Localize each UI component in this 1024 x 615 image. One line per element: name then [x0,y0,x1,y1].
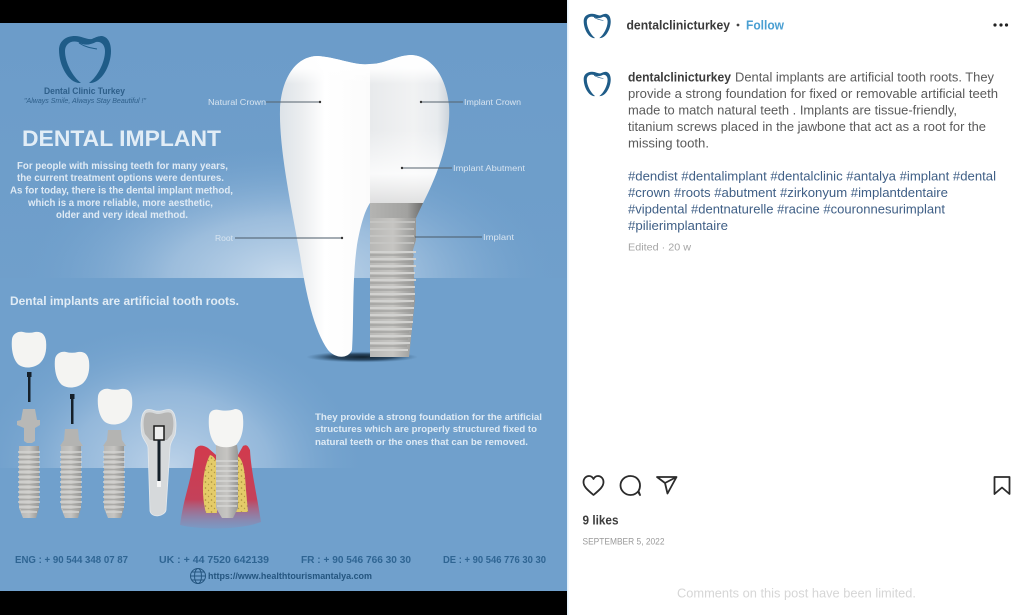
label: natural crown: Natural Crown [208,97,266,107]
contact phone numbers: ENG : + 90 544 348 07 87 [15,554,128,566]
contact phone numbers [15,554,546,566]
intro text block [10,161,233,221]
intro text block: For people with missing teeth for many years, [17,161,228,172]
icon: comment [620,476,640,495]
caption avatar [584,72,611,96]
stage 1: crown, screw, abutment, fixture [12,332,46,518]
caption text [628,70,998,150]
subheading: artificial tooth roots: Dental implants are artificial tooth roots. [10,294,239,308]
implant crown half [370,55,449,203]
caption text: titanium screws placed in the jawbone that act as a root for the [628,119,986,134]
hashtags: #crown #roots #abutment #zirkonyum #implantdentaire [628,185,948,200]
caption text: provide a strong foundation for fixed or removable artificial teeth [628,86,998,101]
caption text: Dental implants are artificial tooth roots. They [735,70,994,84]
icon: bookmark [994,477,1010,494]
caption text: made to match natural teeth . Implants are tissue-friendly, [628,102,957,118]
hashtags: #vipdental #dentnaturelle #racine #couronnesurimplant [628,202,945,216]
label: natural crown [208,97,321,107]
intro text block: older and very ideal method. [56,210,188,221]
label: root: Root [215,234,234,243]
intro text block: which is a more reliable, more aesthetic, [27,198,213,209]
header avatar [584,14,611,38]
shadow under tooth [306,352,418,362]
stage 3: crown, fixture [98,389,132,518]
intro text block: As for today, there is the dental implant method, [10,186,233,196]
caption text: missing tooth. [628,136,709,150]
caption text: dentalclinicturkey [628,70,732,84]
label: implant [415,232,515,242]
label: implant: Implant [483,232,515,242]
foundation text block: natural teeth or the ones that can be removed. [315,437,528,448]
foundation text block [315,412,542,448]
title: DENTAL IMPLANT [22,126,222,151]
panel: infographic image [0,0,567,615]
foundation text block: They provide a strong foundation for the artificial [315,412,542,423]
logo: dental clinic turkey: Dental Clinic Turkey [44,86,125,96]
stage 4: cross section [141,409,176,516]
more options icon [993,23,1008,27]
likes count: 9 likes [582,514,619,528]
hashtags: #pilierimplantaire [628,218,728,233]
logo: dental clinic turkey [24,36,146,105]
intro text block: the current treatment options were dentures. [17,173,224,184]
label: implant crown [420,97,521,107]
icon: heart [584,476,604,495]
natural tooth half [280,56,370,357]
contact phone numbers: UK : + 44 7520 642139 [159,554,269,566]
label: implant abutment: Implant Abutment [453,163,526,173]
website with globe icon [190,568,372,584]
stage 5: implant in jaw [180,409,261,528]
panel: instagram sidebar [567,0,1024,615]
large tooth diagram [208,50,526,362]
header username and follow: Follow [746,18,785,32]
stage 2: crown, screw, fixture [55,352,89,518]
implant stages illustration [12,332,261,528]
contact phone numbers: DE : + 90 546 776 30 30 [443,554,546,566]
post date: SEPTEMBER 5, 2022 [582,536,664,548]
website with globe icon: https://www.healthtourismantalya.com [208,571,372,582]
hashtags: #dendist #dentalimplant #dentalclinic #antalya #implant #dental [628,168,996,184]
label: root [215,234,343,243]
contact phone numbers: FR : + 90 546 766 30 30 [301,554,411,566]
implant screw [370,203,423,357]
comments limited notice: Comments on this post have been limited. [677,586,916,600]
label: implant abutment [401,163,526,173]
header username and follow [626,18,785,32]
label: implant crown: Implant Crown [464,97,521,107]
logo: dental clinic turkey: "Always Smile, Always Stay Beautiful !" [24,96,146,105]
hashtags [628,168,996,233]
icon: send [657,477,676,494]
header username and follow: dentalclinicturkey [626,18,731,32]
foundation text block: structures which are properly structured fixed to [315,424,537,435]
edited timestamp: Edited · 20 w [628,242,691,254]
